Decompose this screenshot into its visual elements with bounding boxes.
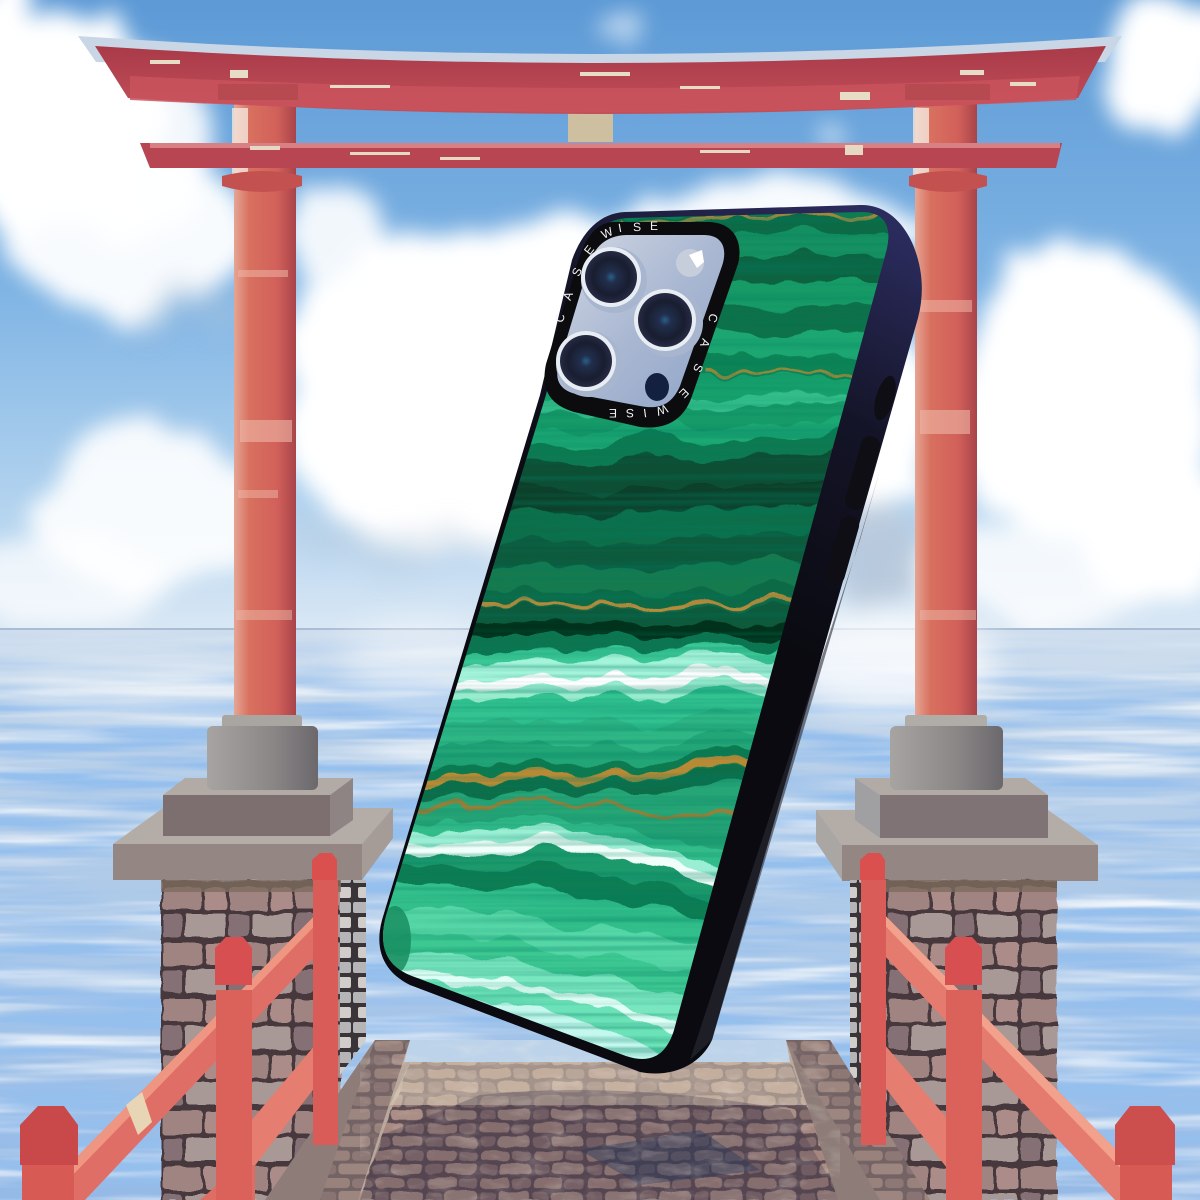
- brand ring text: C: [705, 312, 721, 325]
- camera bump: [544, 219, 740, 428]
- cloud shadows: [130, 288, 925, 605]
- right railing: [860, 853, 1175, 1200]
- phone case body: [379, 205, 922, 1074]
- clouds: [0, 0, 1200, 625]
- horizon mist: [20, 610, 995, 720]
- brand ring text: I: [642, 406, 648, 420]
- torii gate left pillar: [222, 100, 302, 720]
- phone lower side translucent edge: [690, 470, 880, 1060]
- brand ring text: S: [633, 220, 641, 234]
- left brick pier: [161, 880, 366, 1200]
- torii gate right pillar: [909, 100, 987, 720]
- stone walkway: [265, 1040, 930, 1200]
- brand ring text: W: [599, 224, 616, 242]
- left stone base: [113, 715, 393, 880]
- lens top: [581, 247, 647, 313]
- background sky and clouds: [0, 0, 1200, 640]
- right brick pier: [850, 880, 1057, 1200]
- brand ring text: S: [569, 265, 585, 279]
- sea with rippled reflection: [0, 628, 1200, 1200]
- torii top beam: [78, 36, 1122, 114]
- brand ring text: [552, 219, 721, 420]
- brand ring text: S: [626, 406, 634, 420]
- right stone base: [816, 715, 1098, 881]
- brand ring text: C: [552, 311, 568, 324]
- brand ring text: E: [609, 406, 617, 420]
- brand ring text: W: [654, 401, 670, 419]
- brand ring text: E: [581, 243, 597, 257]
- lens bottom: [556, 331, 622, 397]
- brand ring text: A: [697, 337, 713, 349]
- phone with green agate case: [340, 190, 940, 1100]
- side buttons: [824, 373, 900, 586]
- torii lower beam: [140, 143, 1062, 168]
- torii centre strut: [568, 104, 613, 142]
- brand ring text: I: [617, 221, 623, 235]
- brand ring text: E: [650, 219, 658, 233]
- agate back panel: [383, 212, 888, 1059]
- lens right: [634, 289, 703, 357]
- flash: [676, 249, 704, 277]
- brand ring text: S: [690, 361, 706, 375]
- brand ring text: E: [676, 385, 692, 401]
- lidar sensor: [645, 373, 669, 401]
- brand ring text: A: [560, 290, 576, 302]
- left railing: [20, 853, 338, 1200]
- camera plate: [557, 235, 724, 407]
